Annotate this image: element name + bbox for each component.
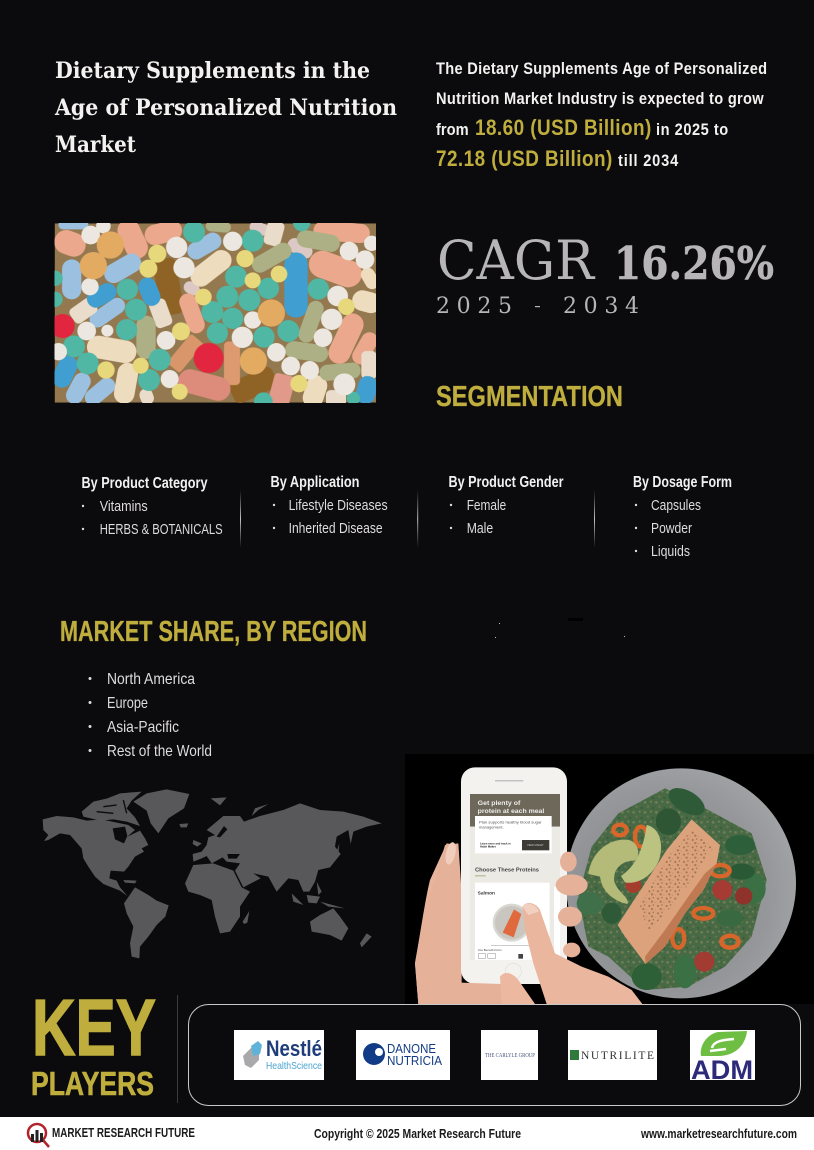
pills layer <box>54 223 376 403</box>
region list: Europe <box>107 695 148 712</box>
segment: application <box>270 474 388 537</box>
avocado <box>588 825 661 904</box>
segment: dosage form <box>633 474 732 560</box>
market forecast text: Nutrition Market Industry is expected to grow <box>436 90 764 108</box>
footer copyright: Copyright © 2025 Market Research Future <box>314 1126 521 1141</box>
market forecast text: in 2025 to <box>656 121 729 139</box>
segment: product gender: Female <box>467 497 506 514</box>
phone: You Benefit From <box>478 949 502 952</box>
image: colourful pills <box>54 223 376 403</box>
market forecast text: from <box>436 121 469 139</box>
logo: Danone Nutricia: DANONE <box>387 1041 436 1056</box>
segmentation heading: SEGMENTATION <box>436 381 623 413</box>
segment: product category: Vitamins <box>100 498 148 515</box>
phone: Learn more and track in <box>480 841 511 845</box>
logo: Danone Nutricia: NUTRICIA <box>387 1053 442 1068</box>
phone: Get plenty of <box>478 800 521 807</box>
market forecast text: The Dietary Supplements Age of Personalized <box>436 60 767 78</box>
CAGR period: 2034 <box>563 294 639 319</box>
segment: dosage form: Capsules <box>651 497 701 514</box>
logo: Nestle Health Science <box>234 1030 324 1080</box>
salmon fillet <box>618 819 720 964</box>
title: Age of Personalized Nutrition <box>54 95 397 121</box>
market share heading: MARKET SHARE, BY REGION <box>60 616 367 648</box>
phone: VIEW MAKET <box>527 844 544 847</box>
key players heading: PLAYERS <box>31 1065 154 1102</box>
segment: product category: By Product Category <box>82 475 208 492</box>
phone: management. <box>479 825 504 830</box>
phone: Choose These Proteins <box>475 868 539 874</box>
segment: dosage form: Powder <box>651 520 692 537</box>
market forecast text: 72.18 (USD Billion) <box>436 147 612 171</box>
key players panel <box>188 1004 800 1106</box>
market forecast text: 18.60 (USD Billion) <box>475 116 651 140</box>
phone: Habit Maker <box>480 845 496 849</box>
logo: ADM <box>690 1030 755 1085</box>
market forecast text: till 2034 <box>618 152 678 170</box>
segment: application: By Application <box>270 474 360 491</box>
logo: Nutrilite: NUTRILITE <box>581 1050 654 1062</box>
segment: application: Lifestyle Diseases <box>289 497 388 514</box>
segment: dosage form: By Dosage Form <box>633 474 732 491</box>
CAGR period: 2025 <box>436 294 512 319</box>
logo: Nestle Health Science: Nestlé <box>266 1036 322 1061</box>
salad <box>577 782 767 990</box>
logo: The Carlyle Group <box>481 1030 538 1080</box>
world map <box>43 789 382 958</box>
hand fingers <box>415 841 642 1004</box>
title: Market <box>55 132 137 158</box>
region list <box>88 671 212 760</box>
phone <box>461 767 567 984</box>
phone: protein at each meal <box>478 808 545 815</box>
market forecast text <box>436 60 767 171</box>
segment: product gender <box>448 474 564 537</box>
footer bar <box>0 1117 814 1150</box>
logo: Nestle Health Science: HealthScience <box>266 1060 322 1072</box>
segment: dosage form: Liquids <box>651 543 690 560</box>
logo: ADM: ADM <box>691 1055 753 1085</box>
region list: Rest of the World <box>107 743 212 760</box>
logo: Danone Nutricia <box>356 1030 450 1080</box>
logo: The Carlyle Group: THE CARLYLE GROUP <box>485 1053 536 1059</box>
title: Dietary Supplements in the <box>55 58 370 84</box>
left hand <box>415 843 462 1004</box>
key players heading: KEY <box>32 983 156 1072</box>
segment: product gender: Male <box>467 520 493 537</box>
logo: Nutrilite <box>568 1030 657 1080</box>
region list: Asia-Pacific <box>107 719 179 736</box>
CAGR heading: 16.26% <box>614 237 774 290</box>
CAGR heading: CAGR <box>437 229 595 292</box>
segment: product category: HERBS & BOTANICALS <box>100 521 223 538</box>
footer logo: MARKET RESEARCH FUTURE <box>52 1125 195 1140</box>
segment: product gender: By Product Gender <box>448 474 564 491</box>
CAGR period <box>436 294 639 319</box>
plate <box>566 768 796 998</box>
region list: North America <box>107 671 195 688</box>
CAGR heading <box>437 229 774 292</box>
phone: Plan supports healthy blood sugar <box>479 819 542 824</box>
key players heading <box>31 983 156 1102</box>
footer logo <box>28 1124 195 1147</box>
phone: Salmon <box>478 890 495 895</box>
segment: application: Inherited Disease <box>289 520 383 537</box>
image: phone and salmon plate <box>405 754 814 1004</box>
segment: product category <box>82 475 223 538</box>
title <box>54 58 397 158</box>
